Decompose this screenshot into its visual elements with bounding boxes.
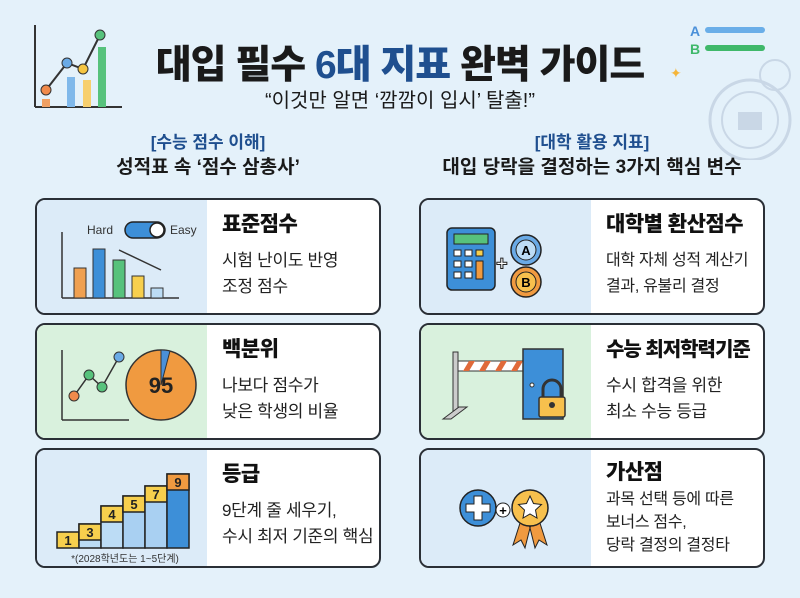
icon: bar chart difficulty: Easy <box>170 223 197 237</box>
icon: grade steps: *(2028학년도는 1~5단계) <box>71 553 179 565</box>
title: 대입 필수 6대 지표 완벽 가이드 <box>156 44 644 87</box>
panel: 표준점수: 시험 난이도 반영 <box>222 251 338 270</box>
panel: 등급 <box>35 448 381 568</box>
decoration: AB bars and college stamp <box>670 23 792 160</box>
icon: plus and medal <box>421 450 591 566</box>
panel: 등급: 9단계 줄 세우기, <box>222 501 336 520</box>
panel: 백분위: 백분위 <box>222 338 278 361</box>
panel: 표준점수 <box>35 198 381 315</box>
panel: 표준점수: 조정 점수 <box>222 277 288 296</box>
icon: grade steps: 1 <box>64 533 72 548</box>
icon: grade steps <box>37 450 207 566</box>
decoration: AB bars and college stamp: B <box>690 41 700 57</box>
icon: grade steps: 5 <box>130 497 138 512</box>
icon: bar chart difficulty <box>37 200 207 313</box>
decoration: AB bars and college stamp: A <box>690 23 700 39</box>
panel: 백분위 <box>35 323 381 440</box>
panel: 수능 최저학력기준 <box>419 323 765 440</box>
decoration: AB bars and college stamp: ✦ <box>670 65 682 81</box>
icon: line chart and pie 95: 95 <box>149 373 173 398</box>
panel: 등급: 등급 <box>222 463 260 486</box>
panel: 표준점수: 표준점수 <box>222 213 297 236</box>
panel: 수능 최저학력기준: 최소 수능 등급 <box>606 402 707 421</box>
icon: calculator A B <box>421 200 591 313</box>
panel: 대학별 환산점수: 대학별 환산점수 <box>606 213 743 236</box>
icon: plus and medal: + <box>499 503 507 518</box>
subtitle: “이것만 알면 ‘깜깜이 입시’ 탈출!” <box>265 90 535 112</box>
heading: left section: [수능 점수 이해] <box>151 133 265 152</box>
icon: calculator A B: + <box>496 253 508 275</box>
icon: grade steps: 4 <box>108 507 116 522</box>
icon: line chart and pie 95 <box>37 325 207 438</box>
heading: right section: [대학 활용 지표] <box>535 133 649 152</box>
panel: 가산점: 당락 결정의 결정타 <box>606 537 730 554</box>
icon: calculator A B: A <box>521 243 531 258</box>
panel: 대학별 환산점수: 대학 자체 성적 계산기 <box>606 252 748 269</box>
icon: bar chart difficulty: Hard <box>87 223 113 237</box>
panel: 대학별 환산점수: 결과, 유불리 결정 <box>606 278 719 295</box>
panel: 백분위: 낮은 학생의 비율 <box>222 402 338 421</box>
subheading: left section: 성적표 속 ‘점수 삼총사’ <box>116 157 300 178</box>
icon: grade steps: 9 <box>174 475 182 490</box>
panel: 가산점: 과목 선택 등에 따른 <box>606 491 734 508</box>
panel: 가산점: 보너스 점수, <box>606 514 686 531</box>
panel: 백분위: 나보다 점수가 <box>222 376 318 395</box>
icon: barrier and locked door <box>421 325 591 438</box>
subheading: right section: 대입 당락을 결정하는 3가지 핵심 변수 <box>442 157 742 178</box>
panel: 대학별 환산점수 <box>419 198 765 315</box>
panel: 수능 최저학력기준: 수시 합격을 위한 <box>606 376 722 395</box>
panel: 수능 최저학력기준: 수능 최저학력기준 <box>606 339 750 361</box>
panel: 가산점 <box>419 448 765 568</box>
panel: 등급: 수시 최저 기준의 핵심 <box>222 527 373 546</box>
icon: grade steps: 3 <box>86 525 94 540</box>
panel: 가산점: 가산점 <box>606 461 662 484</box>
icon: grade steps: 7 <box>152 487 160 502</box>
icon: header chart <box>34 25 122 108</box>
icon: calculator A B: B <box>521 275 531 290</box>
